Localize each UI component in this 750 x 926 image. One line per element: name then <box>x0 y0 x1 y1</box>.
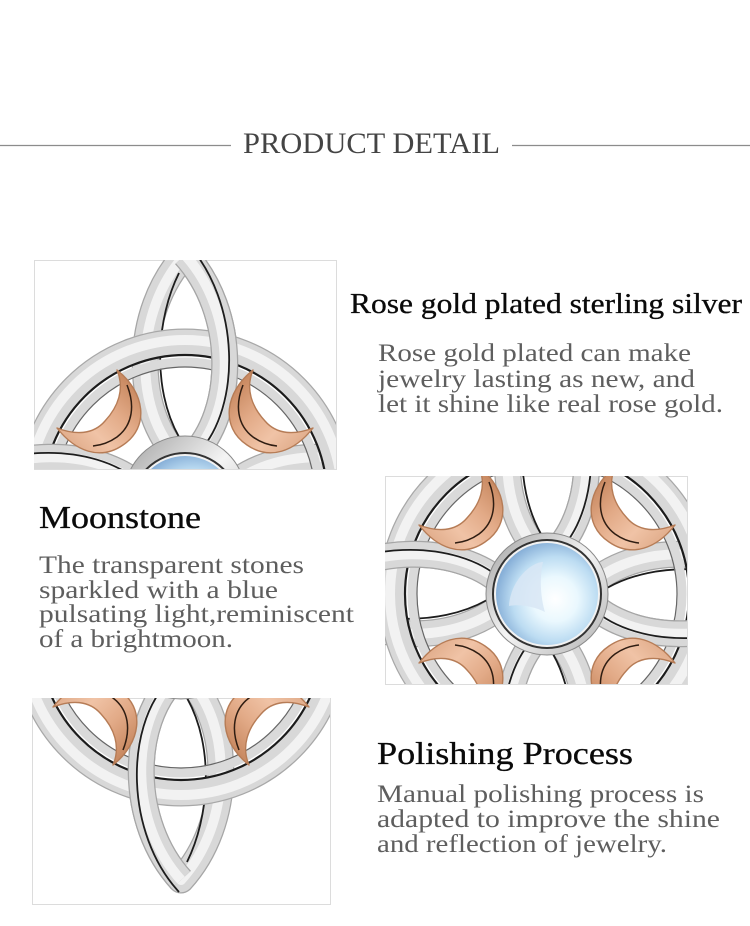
text block: moonstone: The transparent stones <box>39 550 304 579</box>
text block: moonstone <box>39 499 354 653</box>
panel: moonstone photo <box>385 476 688 685</box>
heading: product detail: PRODUCT DETAIL <box>243 127 500 160</box>
text block: polishing process <box>377 735 720 858</box>
text block: polishing process: Polishing Process <box>377 735 633 771</box>
text block: moonstone: of a brightmoon. <box>39 624 233 653</box>
panel: rose gold photo <box>34 260 337 470</box>
text block: polishing process: adapted to improve the shine <box>377 804 720 833</box>
text block: rose gold plated sterling silver: let it shine like real rose gold. <box>378 389 723 418</box>
text block: rose gold plated sterling silver: Rose gold plated sterling silver <box>350 289 743 320</box>
panel: polishing photo <box>32 698 331 905</box>
text block: rose gold plated sterling silver: jewelry lasting as new, and <box>377 364 695 393</box>
text block: polishing process: Manual polishing process is <box>377 779 704 808</box>
text block: rose gold plated sterling silver: Rose gold plated can make <box>378 338 691 367</box>
text block: polishing process: and reflection of jewelry. <box>377 829 667 858</box>
text block: rose gold plated sterling silver <box>350 289 743 418</box>
text block: moonstone: Moonstone <box>39 499 201 535</box>
text block: moonstone: pulsating light,reminiscent <box>39 599 354 628</box>
text block: moonstone: sparkled with a blue <box>39 575 278 604</box>
